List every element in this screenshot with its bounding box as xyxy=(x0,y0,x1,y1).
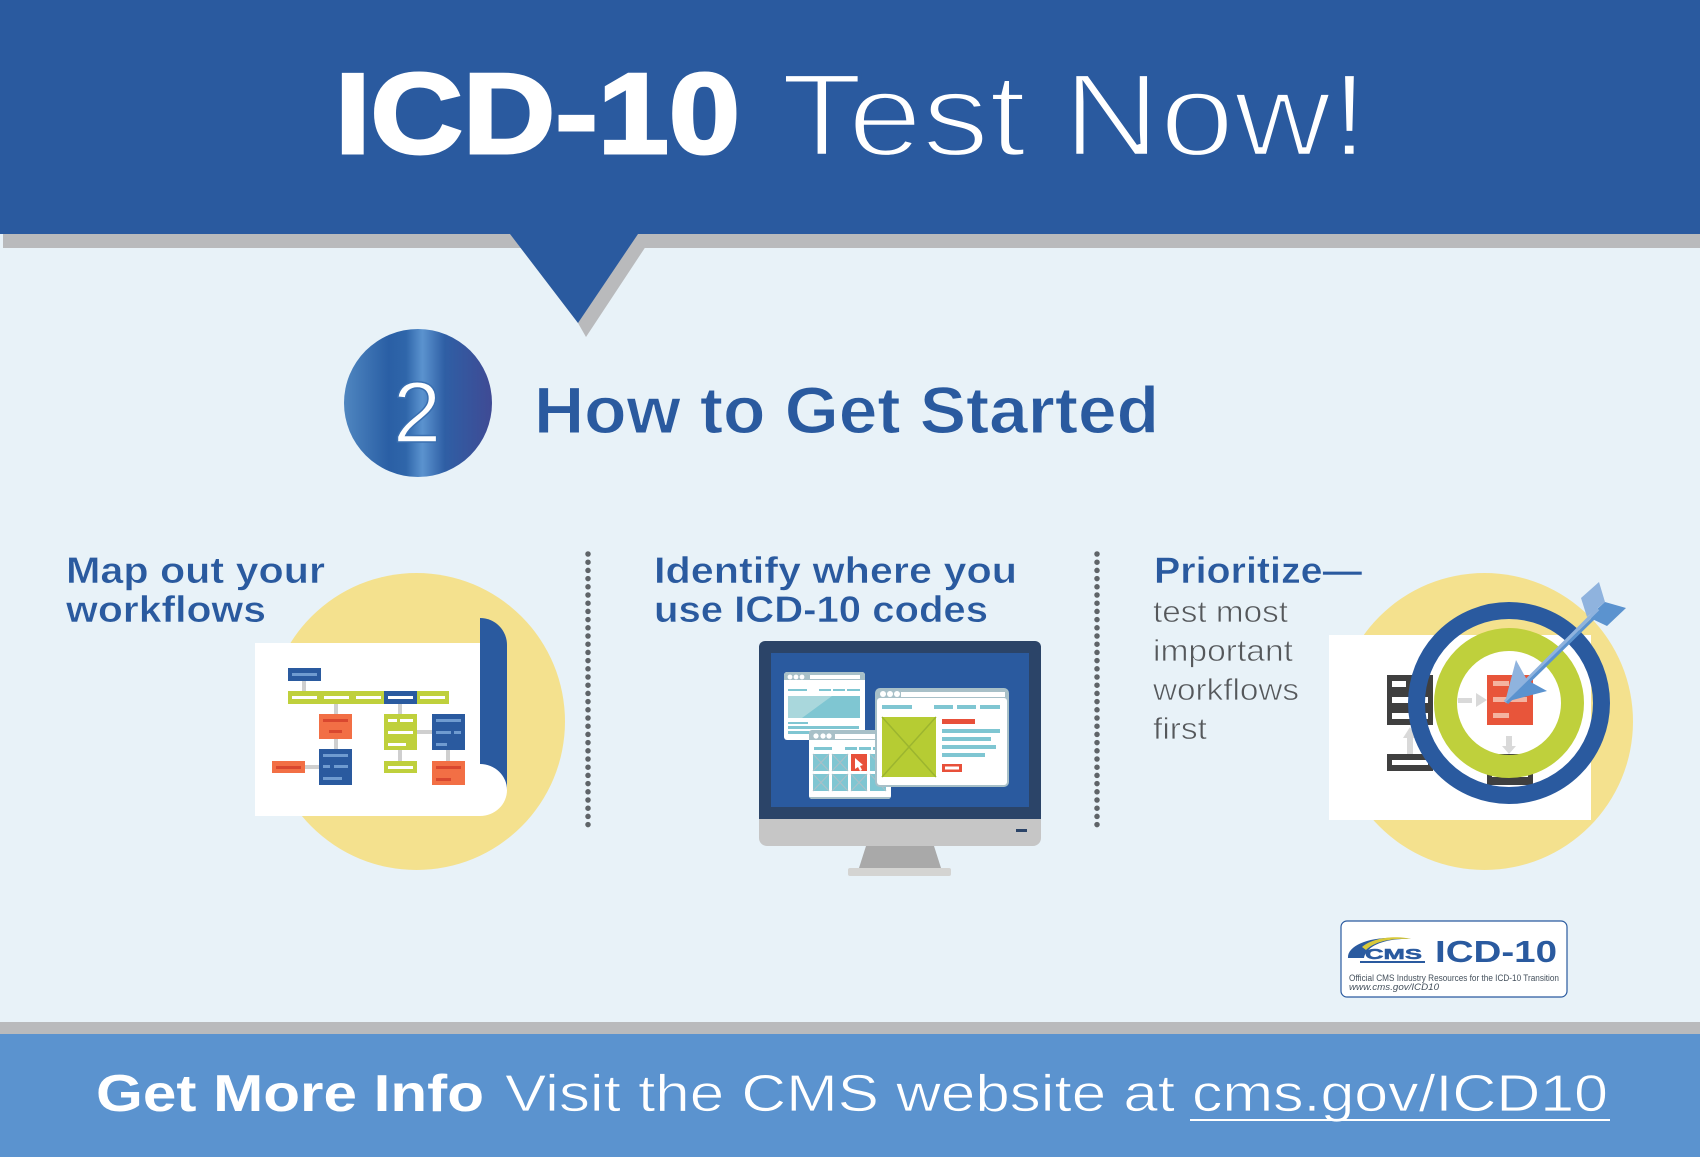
footer call to action: Get More Info xyxy=(96,1065,484,1123)
column 3 body text: workflows xyxy=(1152,672,1299,707)
column 3 body text: important xyxy=(1153,633,1293,668)
logo: CMS ICD-10: ICD-10 xyxy=(1435,934,1557,969)
window: grid of thumbnails xyxy=(809,730,891,799)
footer call to action xyxy=(96,1065,1610,1123)
divider right xyxy=(1094,554,1100,830)
column 2 heading: use ICD-10 codes xyxy=(654,589,988,630)
footer band xyxy=(0,1022,1700,1157)
section heading: How to Get Started xyxy=(534,373,1159,447)
column 3 body text: first xyxy=(1153,711,1207,746)
logo: CMS ICD-10: CMS xyxy=(1365,946,1422,963)
footer call to action: Visit the CMS website at xyxy=(505,1065,1176,1123)
window: front product page xyxy=(875,688,1009,787)
title: ICD-10 xyxy=(335,51,740,178)
window: back left xyxy=(784,672,865,740)
logo: CMS ICD-10 xyxy=(1341,921,1567,997)
divider left xyxy=(585,554,591,830)
column 1 heading: workflows xyxy=(65,589,266,630)
step number badge: 2 xyxy=(393,365,441,461)
column 1 heading: Map out your xyxy=(66,550,325,591)
column 2 heading: Identify where you xyxy=(654,550,1017,591)
title xyxy=(335,50,1368,182)
step number badge xyxy=(344,329,492,477)
footer call to action: cms.gov/ICD10 xyxy=(1192,1065,1608,1123)
logo: CMS ICD-10: www.cms.gov/ICD10 xyxy=(1349,982,1439,992)
logo: CMS ICD-10: Official CMS Industry Resources for the ICD-10 Transition xyxy=(1349,973,1559,983)
title: Test Now! xyxy=(781,50,1368,182)
column 3 heading: Prioritize— xyxy=(1154,550,1362,591)
icon: computer monitor with windows xyxy=(759,641,1041,876)
header banner xyxy=(0,0,1700,337)
icon: workflow document on yellow circle xyxy=(255,573,565,870)
column 3 body text: test most xyxy=(1153,594,1288,629)
icon: target with arrow xyxy=(1329,573,1633,870)
